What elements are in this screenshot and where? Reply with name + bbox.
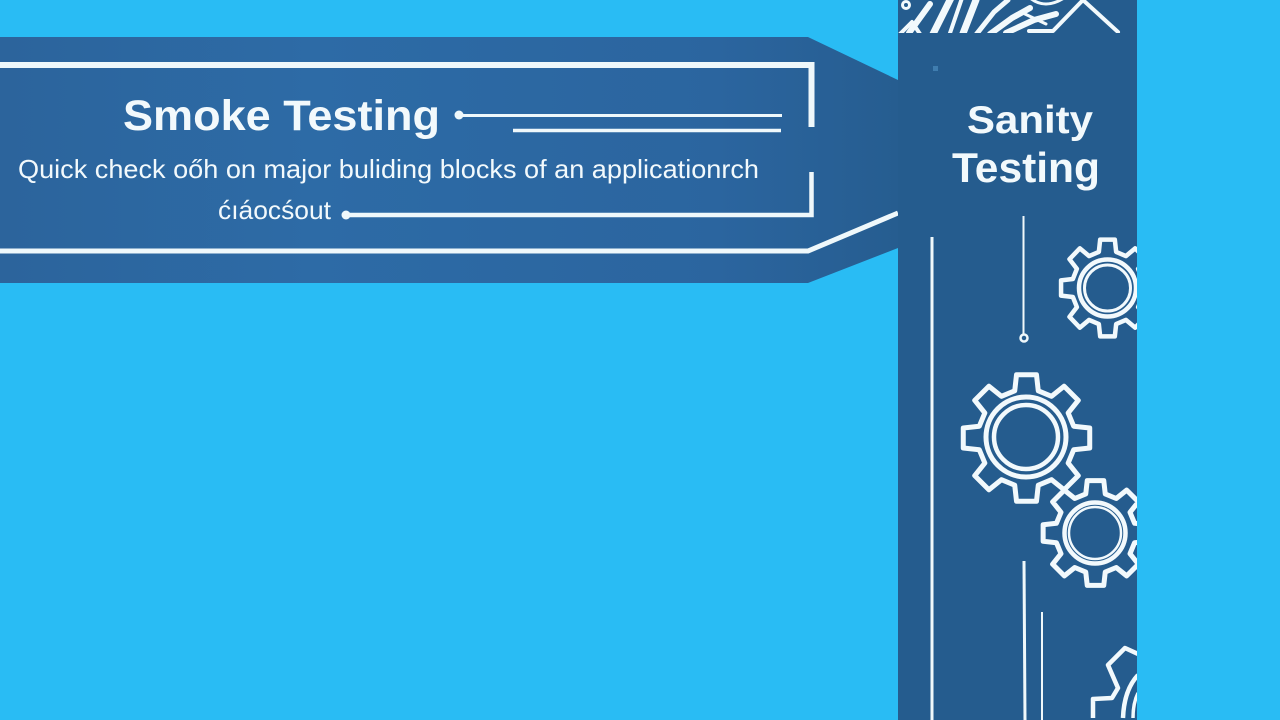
icon: bottom gear (1093, 648, 1138, 718)
banner frame lines (0, 65, 898, 251)
icon: gear top right (1058, 237, 1137, 339)
vertical lines (932, 216, 1042, 720)
leader lines (342, 110, 782, 220)
text: description line one: Quick check oőh on major buliding blocks of an applicationrch (18, 154, 759, 184)
panel: smoke testing banner (0, 37, 898, 283)
text: description line two: ćıáocśout (218, 195, 332, 225)
heading: smoke testing: Smoke Testing (123, 92, 440, 140)
heading: sanity testing: Sanity (967, 99, 1093, 142)
icon: middle gear (1043, 481, 1148, 585)
icon: large gear (963, 375, 1090, 501)
heading: sanity testing: Testing (952, 144, 1100, 191)
banner arrow shape (0, 37, 898, 283)
panel: sanity testing column (898, 0, 1154, 720)
illustration fragment at top (900, 0, 1118, 36)
small dot (933, 66, 938, 71)
column background (898, 0, 1137, 720)
